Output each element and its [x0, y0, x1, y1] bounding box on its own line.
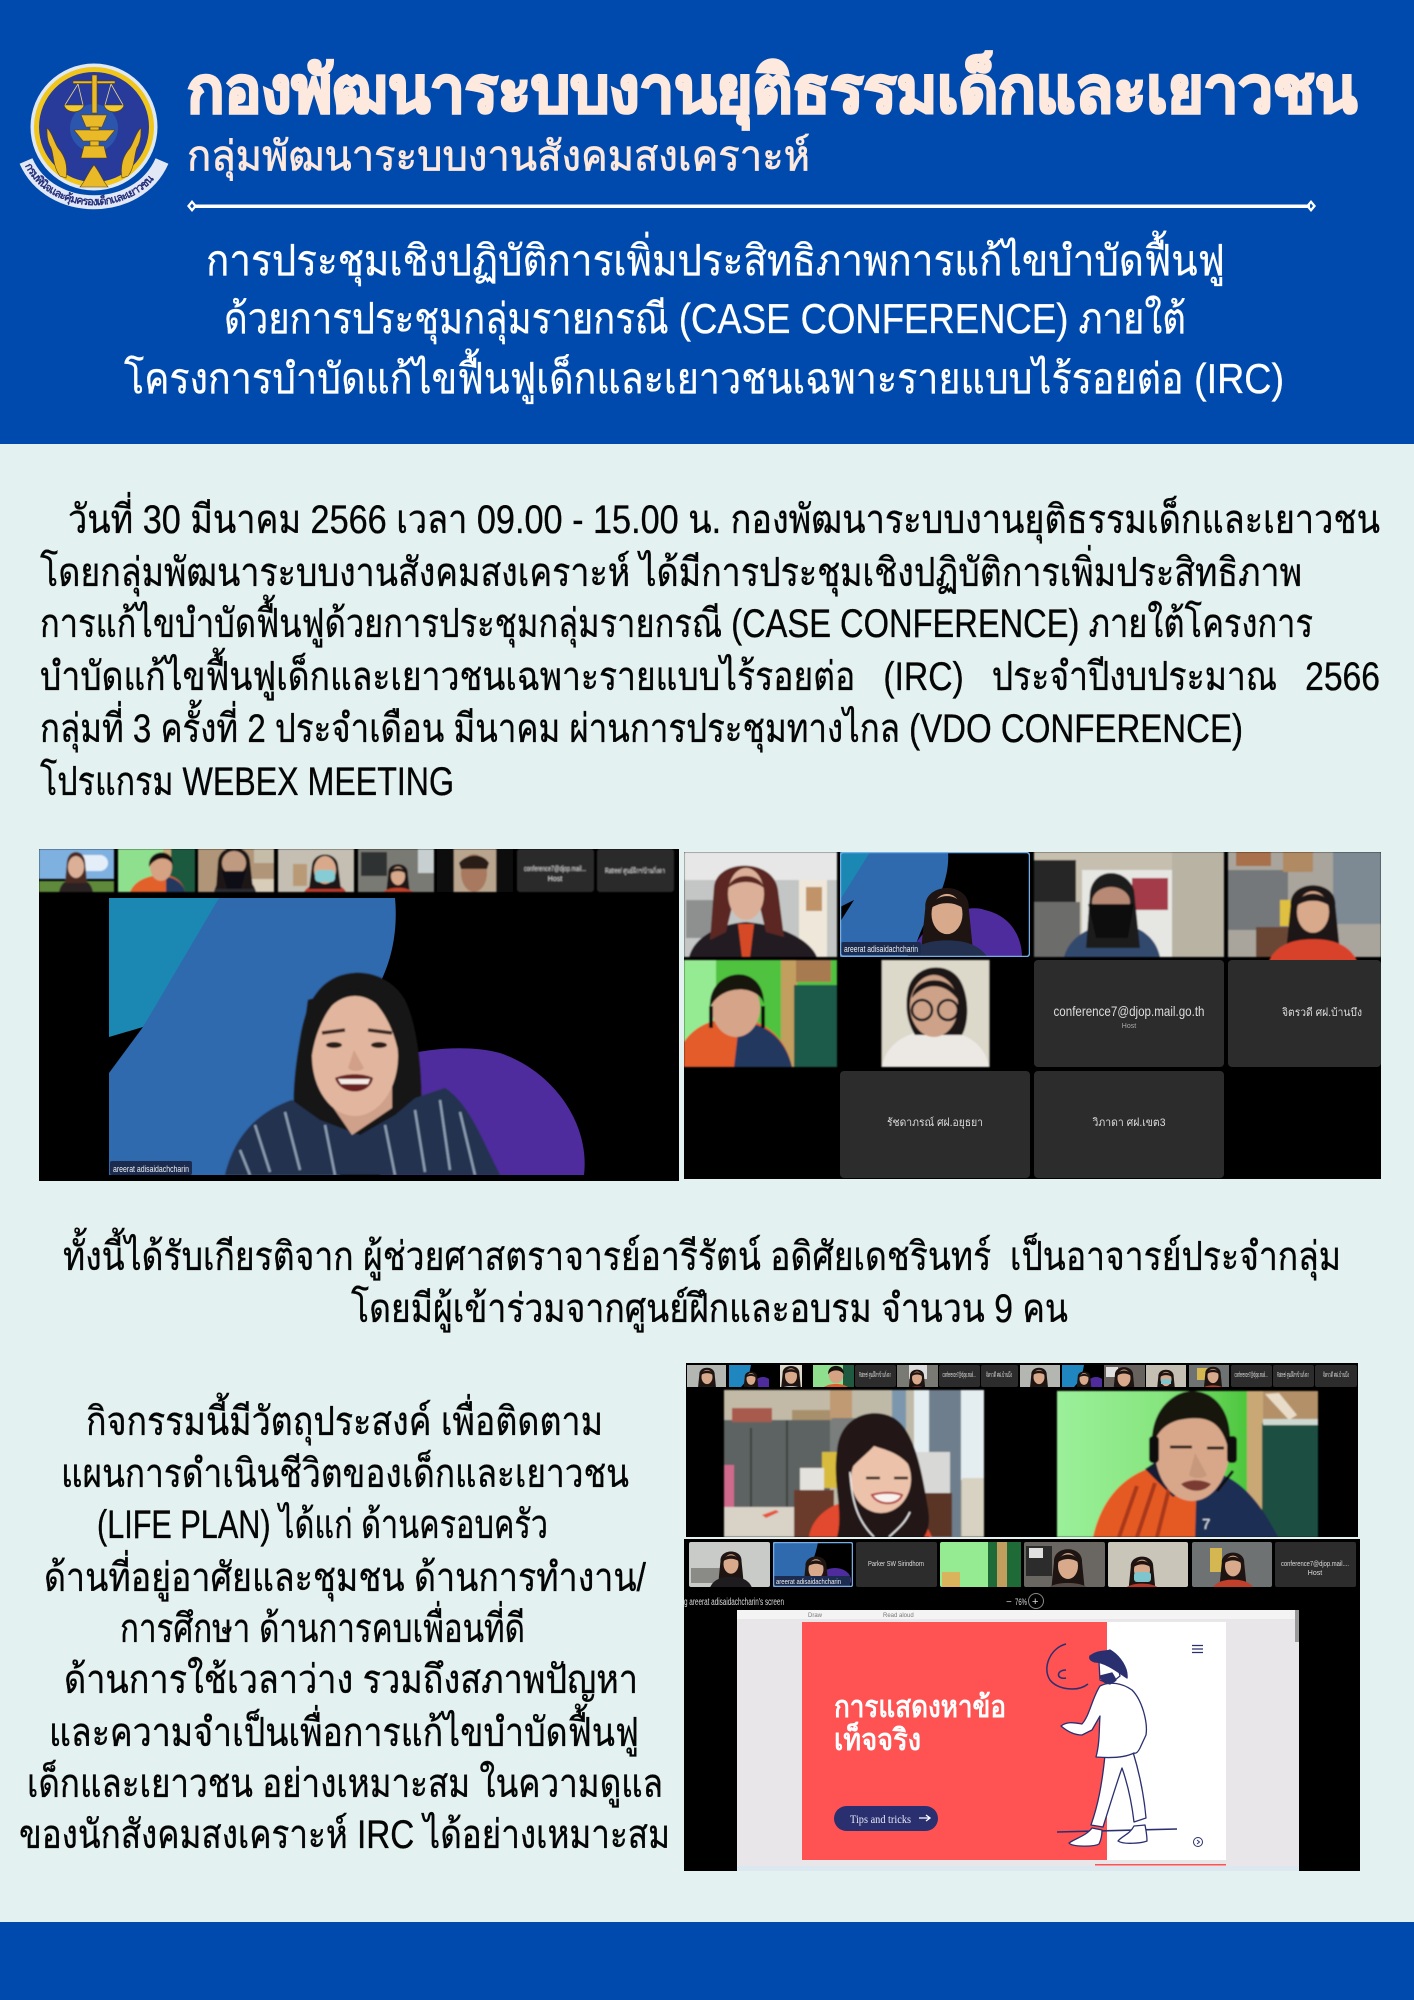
tile: conference host: Host: [1122, 1023, 1136, 1030]
participant: active speaker: areerat adisaidachcharin: [844, 944, 918, 954]
objectives text: (LIFE PLAN) ได้แก่ ด้านครอบครัว: [97, 1502, 548, 1547]
thumbnail strip: [39, 848, 674, 904]
logo ribbon text: กรมพินิจและคุ้มครองเด็กและเยาวชน: [25, 164, 154, 206]
objectives text: กิจกรรมนี้มีวัตถุประสงค์ เพื่อติดตาม: [86, 1392, 603, 1446]
tile: participant name: [1228, 960, 1381, 1067]
share bar: g areerat adisaidachcharin's screen: [684, 1597, 784, 1608]
slide next icon: [1194, 1838, 1202, 1846]
browser toolbar: [737, 1610, 1299, 1619]
browser toolbar: Read aloud: [883, 1613, 914, 1619]
participant: active speaker: [840, 852, 1030, 957]
browser toolbar: Draw: [808, 1613, 823, 1619]
thumbnail strip: areerat adisaidachcharin: [776, 1579, 841, 1586]
share bar: 76%: [1015, 1597, 1027, 1607]
share bar: +: [1032, 1596, 1038, 1608]
intro paragraph: [40, 492, 1380, 804]
objectives text: แผนการดำเนินชีวิตของเด็กและเยาวชน: [61, 1449, 629, 1496]
participant: woman in red shirt: [1227, 852, 1381, 960]
thumbnail strip: Host: [1308, 1570, 1322, 1577]
photo: shared slide screen: [684, 1539, 1360, 1871]
event heading: การประชุมเชิงปฏิบัติการเพิ่มประสิทธิภาพการแก้ไขบำบัดฟื้นฟู: [206, 230, 1225, 287]
acknowledgement text: โดยมีผู้เข้าร่วมจากศูนย์ฝึกและอบรม จำนวน 9 คน: [351, 1286, 1068, 1332]
slide title: [834, 1691, 1006, 1757]
tile: participant name: [1034, 1071, 1224, 1178]
slide button: [834, 1806, 938, 1831]
footer band: [0, 1922, 1414, 2000]
share bar: [684, 1594, 1044, 1608]
slide title: เท็จจริง: [834, 1721, 921, 1757]
photo: speaker view with thumbnails: [39, 849, 679, 1181]
photo: two participants side by side: [686, 1363, 1358, 1537]
objectives text: [19, 1392, 670, 1857]
title: กองพัฒนาระบบงานยุติธรรมเด็กและเยาวชน: [187, 52, 1357, 130]
participant: woman with glasses: [880, 959, 990, 1068]
thumbnail strip: [687, 1365, 1357, 1404]
participant: man on green screen: [684, 958, 838, 1068]
slide button: Tips and tricks: [850, 1812, 911, 1826]
objectives text: ด้านการใช้เวลาว่าง รวมถึงสภาพปัญหา: [64, 1656, 638, 1702]
thumbnail strip: [689, 1542, 1356, 1606]
slide: [802, 1622, 1226, 1860]
tile: conference host: [1034, 960, 1224, 1067]
slide title: การแสดงหาข้อ: [834, 1691, 1006, 1724]
event heading: ด้วยการประชุมกลุ่มรายกรณี (CASE CONFERENCE) ภายใต้: [224, 295, 1186, 345]
objectives text: เด็กและเยาวชน อย่างเหมาะสม ในความดูแล: [27, 1759, 663, 1807]
participant: office woman: [684, 852, 838, 958]
tile: participant name: รัชดาภรณ์ ศฝ.อยุธยา: [887, 1116, 983, 1129]
photo: gallery grid of participants: [684, 852, 1381, 1179]
subtitle: กลุ่มพัฒนาระบบงานสังคมสงเคราะห์: [187, 133, 810, 181]
scales, urn and naga emblems: [47, 75, 141, 187]
video: man with headset: [1056, 1390, 1319, 1537]
illustration: walking man: [1047, 1644, 1177, 1846]
divider with diamond ends: [187, 200, 1316, 212]
objectives text: ของนักสังคมสงเคราะห์ IRC ได้อย่างเหมาะสม: [19, 1812, 670, 1857]
tile: participant name: วิภาดา ศฝ.เขต3: [1092, 1117, 1166, 1129]
thumbnail strip: Host: [548, 876, 562, 883]
main speaker video: [109, 898, 585, 1175]
tile: participant name: [840, 1071, 1030, 1178]
slide menu icon: [1192, 1646, 1203, 1652]
event heading: [124, 230, 1284, 404]
objectives text: ด้านที่อยู่อาศัยและชุมชน ด้านการทำงาน/: [44, 1550, 647, 1602]
video: woman in office: [723, 1388, 986, 1537]
browser window: [737, 1610, 1299, 1871]
video: man with headset: 7: [1202, 1516, 1210, 1533]
intro paragraph: โปรแกรม WEBEX MEETING: [40, 759, 454, 804]
acknowledgement text: [63, 1227, 1341, 1332]
objectives text: การศึกษา ด้านการคบเพื่อนที่ดี: [120, 1601, 525, 1651]
presenter: [225, 973, 500, 1175]
event heading: โครงการบำบัดแก้ไขฟื้นฟูเด็กและเยาวชนเฉพาะรายแบบไร้รอยต่อ (IRC): [124, 348, 1284, 404]
participant: woman with black mask: [1033, 852, 1225, 958]
name tag: areerat adisaidachcharin: [113, 1164, 189, 1175]
objectives text: และความจำเป็นเพื่อการแก้ไขบำบัดฟื้นฟู: [49, 1703, 639, 1756]
header band: [0, 0, 1414, 444]
share bar: −: [1006, 1597, 1012, 1608]
tile: participant name: จิตรวดี ศฝ.บ้านบึง: [1281, 1006, 1362, 1019]
name tag: [110, 1161, 192, 1175]
thumbnail strip: Parker SW Sirindhorn: [868, 1561, 924, 1568]
logo: department seal: [20, 64, 168, 210]
